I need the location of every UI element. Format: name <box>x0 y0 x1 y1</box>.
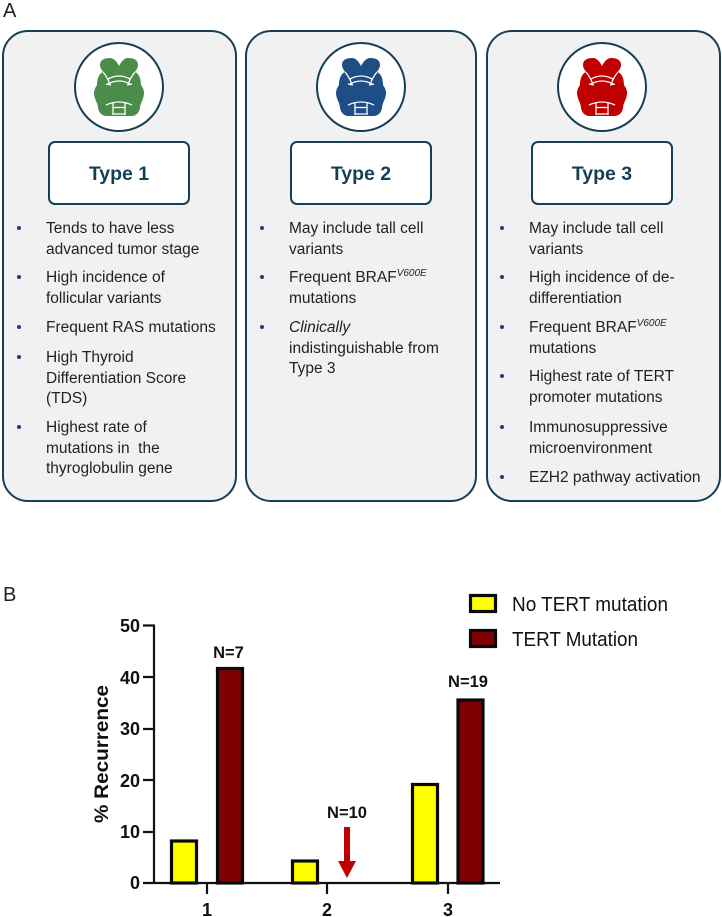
list: Type 1 traits: thyroglobulin gene <box>46 460 173 477</box>
list: Type 1 traits: follicular variants <box>46 290 161 306</box>
list: Type 1 traits: Highest rate of <box>46 419 147 436</box>
list: Type 1 traits: (TDS) <box>46 390 87 407</box>
heading: Type 3 <box>531 141 673 205</box>
list: Type 3 traits: Frequent BRAFV600E <box>529 318 667 336</box>
list: Type 3 traits: promoter mutations <box>529 388 663 406</box>
arrow: red down arrow <box>338 827 356 878</box>
y axis tick labels: 0 <box>130 873 140 893</box>
heading: Type 1 <box>48 141 190 205</box>
N labels: N=10 <box>327 804 367 822</box>
icon: green thyroid <box>75 43 163 131</box>
list: Type 3 traits <box>500 220 700 486</box>
y axis tick labels: 40 <box>120 668 140 688</box>
list: Type 2 traits <box>260 220 439 377</box>
list: Type 2 traits: variants <box>289 240 343 258</box>
list: Type 3 traits: EZH2 pathway activation <box>529 469 700 486</box>
y axis tick labels: 20 <box>120 771 140 791</box>
list: Type 3 traits: Highest rate of TERT <box>529 368 674 385</box>
list: Type 1 traits: High incidence of <box>46 269 165 286</box>
icon: red thyroid <box>558 43 646 131</box>
list: Type 1 traits: High Thyroid <box>46 349 134 366</box>
list: Type 2 traits: May include tall cell <box>289 220 423 237</box>
list: Type 3 traits: differentiation <box>529 290 622 306</box>
bar chart: % recurrence <box>92 594 668 917</box>
heading: Type 3: Type 3 <box>572 163 632 185</box>
panel label B: B <box>3 584 16 606</box>
panel: Type 3 <box>486 30 721 502</box>
list: Type 3 traits: variants <box>529 240 583 258</box>
list: Type 3 traits: mutations <box>529 340 596 356</box>
N labels: N=7 <box>213 644 244 662</box>
panel: Type 2 <box>245 30 477 502</box>
y axis tick labels: 50 <box>120 616 140 636</box>
panel: Type 1 <box>2 30 237 502</box>
list: Type 2 traits: mutations <box>289 290 356 306</box>
bars <box>172 668 483 883</box>
list: Type 3 traits: May include tall cell <box>529 220 663 237</box>
y axis tick labels: 30 <box>120 719 140 739</box>
heading: Type 2 <box>290 141 432 205</box>
N labels <box>213 644 488 822</box>
legend: No TERT mutation <box>512 594 668 616</box>
list: Type 1 traits: Differentiation Score <box>46 370 186 386</box>
list: Type 3 traits: Immunosuppressive <box>529 419 668 436</box>
list: Type 1 traits: advanced tumor stage <box>46 240 199 258</box>
list: Type 2 traits: Clinically <box>289 319 350 336</box>
y axis tick labels: 10 <box>120 822 140 842</box>
icon: blue thyroid <box>317 43 405 131</box>
list: Type 2 traits: Frequent BRAFV600E <box>289 268 427 286</box>
list: Type 1 traits: mutations in the <box>46 440 160 456</box>
list: Type 2 traits: Type 3 <box>289 360 336 377</box>
list: Type 3 traits: microenvironment <box>529 440 652 456</box>
list: Type 3 traits: High incidence of de- <box>529 269 675 286</box>
legend: TERT Mutation <box>512 629 638 651</box>
icons: thyroid glands <box>74 42 647 132</box>
list: Type 1 traits <box>17 220 216 477</box>
N labels: N=19 <box>448 673 488 691</box>
legend <box>470 594 668 651</box>
panel label A: A <box>3 0 16 22</box>
y axis <box>143 624 500 894</box>
list: Type 1 traits: Tends to have less <box>46 220 174 237</box>
x axis labels <box>202 900 453 917</box>
heading: Type 1: Type 1 <box>89 163 149 185</box>
heading: Type 2: Type 2 <box>331 163 391 185</box>
list: Type 1 traits: Frequent RAS mutations <box>46 319 216 336</box>
list: Type 2 traits: indistinguishable from <box>289 340 439 356</box>
y axis tick labels <box>120 616 140 893</box>
y axis title: % Recurrence <box>92 685 113 823</box>
